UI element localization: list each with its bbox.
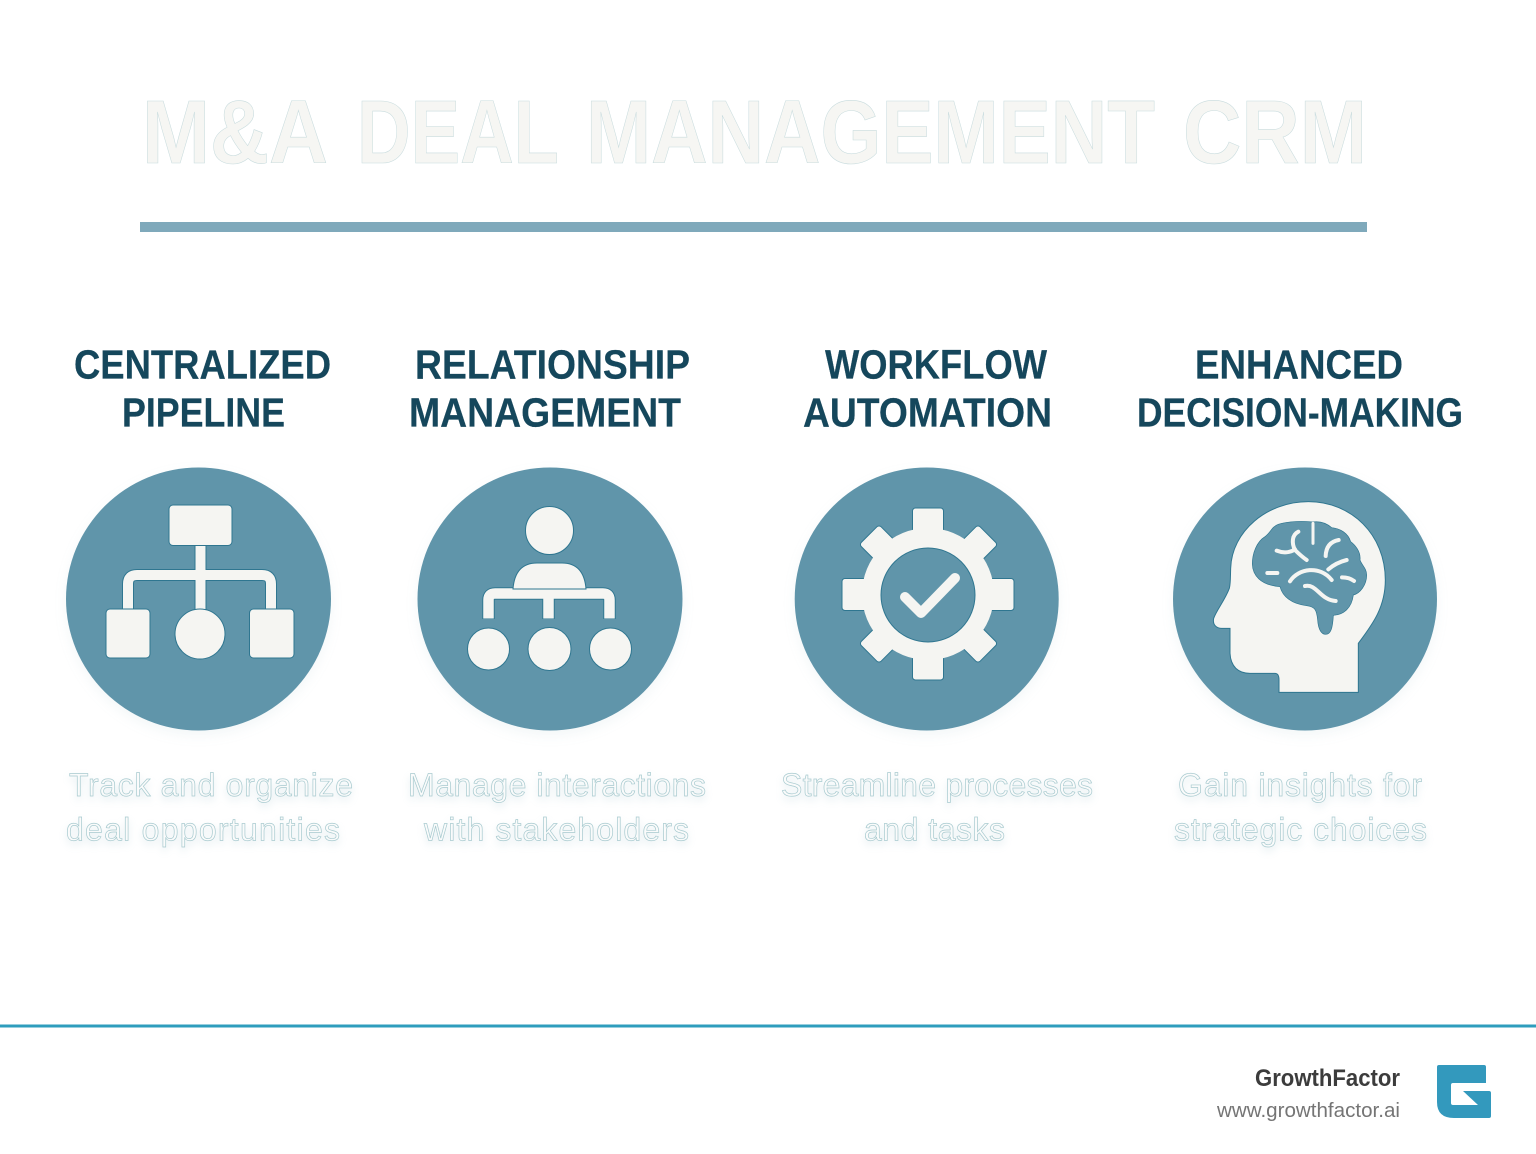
heading: relationship management: RELATIONSHIP: [415, 342, 690, 388]
panel: enhanced decision-making: [1137, 342, 1463, 848]
title underline rule: [140, 222, 1367, 232]
heading: workflow automation: [803, 342, 1052, 436]
description: enhanced decision-making: Gain insights for: [1178, 767, 1422, 803]
icon: head with brain in circle: [1173, 468, 1437, 730]
icon: gear with check mark in circle: [795, 468, 1059, 730]
icon: GrowthFactor G logo: [1437, 1065, 1491, 1118]
panel: workflow automation: [781, 342, 1093, 848]
description: relationship management: Manage interactions: [408, 767, 706, 803]
title: [142, 83, 1367, 183]
description: enhanced decision-making: strategic choices: [1174, 812, 1427, 848]
description: centralized pipeline: Track and organize: [69, 767, 353, 803]
title: MANAGEMENT: [586, 83, 1155, 183]
heading: relationship management: [409, 342, 690, 436]
heading: workflow automation: AUTOMATION: [803, 390, 1052, 436]
icon: people hierarchy in circle: [418, 468, 682, 730]
description: workflow automation: and tasks: [864, 812, 1005, 848]
heading: centralized pipeline: PIPELINE: [122, 390, 285, 436]
panel: centralized pipeline: [66, 342, 353, 848]
heading: enhanced decision-making: ENHANCED: [1195, 342, 1403, 388]
heading: relationship management: MANAGEMENT: [409, 390, 681, 436]
footer divider line: [0, 1024, 1536, 1028]
description: workflow automation: [781, 767, 1093, 848]
panel: relationship management: [408, 342, 706, 848]
title: DEAL: [357, 83, 559, 183]
heading: enhanced decision-making: [1137, 342, 1463, 436]
description: centralized pipeline: deal opportunities: [66, 812, 340, 848]
description: enhanced decision-making: [1174, 767, 1427, 848]
description: workflow automation: Streamline processes: [781, 767, 1093, 803]
description: relationship management: with stakeholders: [423, 812, 689, 848]
title: CRM: [1183, 83, 1367, 183]
heading: enhanced decision-making: DECISION-MAKING: [1137, 390, 1463, 436]
footer website url: www.growthfactor.ai: [1216, 1100, 1400, 1122]
heading: centralized pipeline: CENTRALIZED: [74, 342, 331, 388]
footer brand name: GrowthFactor: [1255, 1065, 1400, 1092]
heading: workflow automation: WORKFLOW: [825, 342, 1047, 388]
heading: centralized pipeline: [74, 342, 331, 436]
description: relationship management: [408, 767, 706, 848]
title: M&A: [142, 83, 328, 183]
description: centralized pipeline: [66, 767, 353, 848]
icon: pipeline org chart in circle: [66, 468, 331, 730]
